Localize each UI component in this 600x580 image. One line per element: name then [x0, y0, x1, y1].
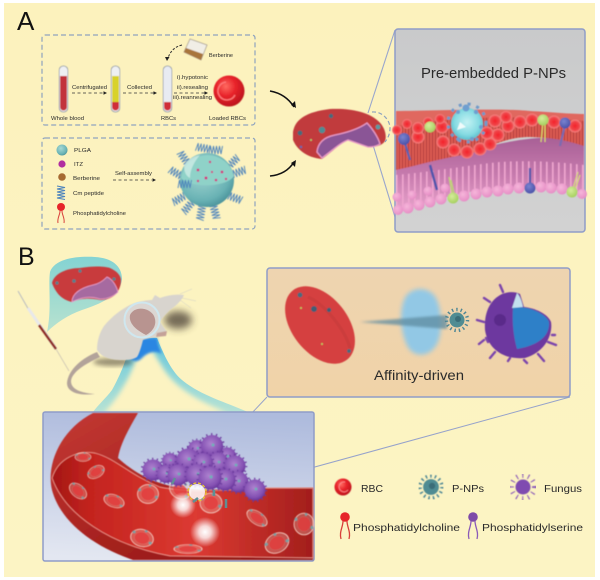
icon: Phosphatidylserine — [468, 512, 478, 539]
arrow: centrifugated — [72, 91, 107, 95]
icon: RBC in bubble — [52, 266, 121, 302]
legend labels: Self-assembly — [115, 171, 152, 177]
arrow: berberine addition — [165, 45, 182, 61]
label: RBC: RBC — [361, 483, 383, 495]
icon: berberine vial — [184, 39, 207, 60]
connector lines to affinity panel — [220, 397, 570, 482]
callout bubble: RBC in bloodstream — [47, 257, 122, 332]
workflow labels: Centrifugated — [72, 85, 107, 91]
dashed selection circle — [372, 112, 390, 142]
workflow labels: ii).resealing — [177, 85, 208, 91]
label: P-NPs: P-NPs — [452, 483, 484, 495]
icon: Fungus — [512, 476, 534, 498]
arrow: curved upper — [270, 91, 294, 107]
icon: syringe — [18, 291, 69, 371]
icon: berberine — [58, 173, 66, 181]
illustration: cut-away fungus — [477, 285, 556, 363]
legend — [334, 476, 583, 539]
panel: P-NP self-assembly — [42, 138, 255, 229]
icon: PLGA — [56, 144, 68, 156]
legend labels: PLGA — [74, 148, 91, 154]
icon: Cm peptide — [57, 186, 65, 200]
workflow labels: Berberine — [209, 53, 233, 59]
dashed highlight circle — [188, 483, 206, 501]
illustration: P-NP — [446, 310, 468, 330]
label: Phosphatidylserine: Phosphatidylserine — [482, 522, 583, 534]
panel: loading RBCs workflow — [42, 35, 255, 125]
legend labels: Cm peptide — [73, 191, 104, 197]
illustration: blue motion cloud — [360, 289, 447, 355]
caption: Affinity-driven: Affinity-driven — [374, 367, 464, 383]
workflow labels: iii).reannealing — [173, 95, 212, 101]
glow spots — [170, 484, 220, 547]
P-NP markers near clot — [172, 478, 226, 508]
workflow labels: RBCs — [161, 116, 176, 122]
legend labels — [73, 148, 152, 217]
tail shadow — [93, 358, 133, 366]
mouse shadow — [164, 311, 192, 329]
illustration: mouse — [67, 289, 196, 395]
panel: blood vessel scene — [43, 412, 314, 561]
illustration: loaded RBC cross-section — [293, 109, 386, 159]
arrow: resealing — [174, 91, 208, 95]
legend labels: ITZ — [74, 162, 84, 168]
workflow labels — [51, 53, 246, 122]
workflow labels: Collected — [127, 85, 152, 91]
arrow: collected — [123, 91, 157, 95]
arrow: curved lower — [270, 162, 294, 176]
icon: RBC tube — [163, 66, 172, 112]
blood cells — [66, 452, 314, 557]
panel: affinity-driven — [267, 268, 570, 397]
heading: Pre-embedded P-NPs: Pre-embedded P-NPs — [421, 65, 566, 82]
icon: loaded RBC — [214, 76, 244, 106]
icon: P-NPs — [420, 476, 442, 498]
legend labels: Phosphatidylcholine — [73, 211, 126, 217]
fungus cluster — [142, 434, 266, 501]
icon: tube of whole blood — [59, 66, 68, 112]
membrane lipid bilayer — [392, 104, 587, 215]
arrow: self-assembly — [113, 178, 156, 182]
icon: Phosphatidylcholine — [340, 512, 350, 539]
vessel floor — [52, 452, 313, 558]
vessel wall — [51, 413, 313, 560]
workflow labels: i).hypotonic — [177, 75, 208, 81]
label: Fungus: Fungus — [544, 483, 582, 495]
label: B: B — [18, 243, 35, 271]
label: A: A — [17, 6, 35, 36]
funnel from mouse to vessel — [93, 338, 248, 413]
icon: phosphatidylcholine — [57, 203, 65, 223]
panel: pre-embedded P-NPs membrane — [392, 29, 587, 232]
legend labels: Berberine — [73, 176, 100, 182]
arrow head lower — [291, 160, 296, 167]
icon: RBC — [334, 478, 352, 496]
label: Phosphatidylcholine: Phosphatidylcholine — [353, 522, 460, 534]
illustration: RBC oval — [271, 273, 369, 377]
arrow head upper — [291, 101, 296, 108]
illustration: mouse tissue window — [124, 302, 160, 338]
icon: centrifuged tube — [111, 66, 120, 112]
icon: P-NP sphere with peptides — [168, 143, 247, 221]
workflow labels: Whole blood — [51, 116, 84, 122]
workflow labels: Loaded RBCs — [209, 116, 246, 122]
icon: ITZ — [58, 160, 66, 168]
zoom lines to membrane — [368, 30, 395, 217]
